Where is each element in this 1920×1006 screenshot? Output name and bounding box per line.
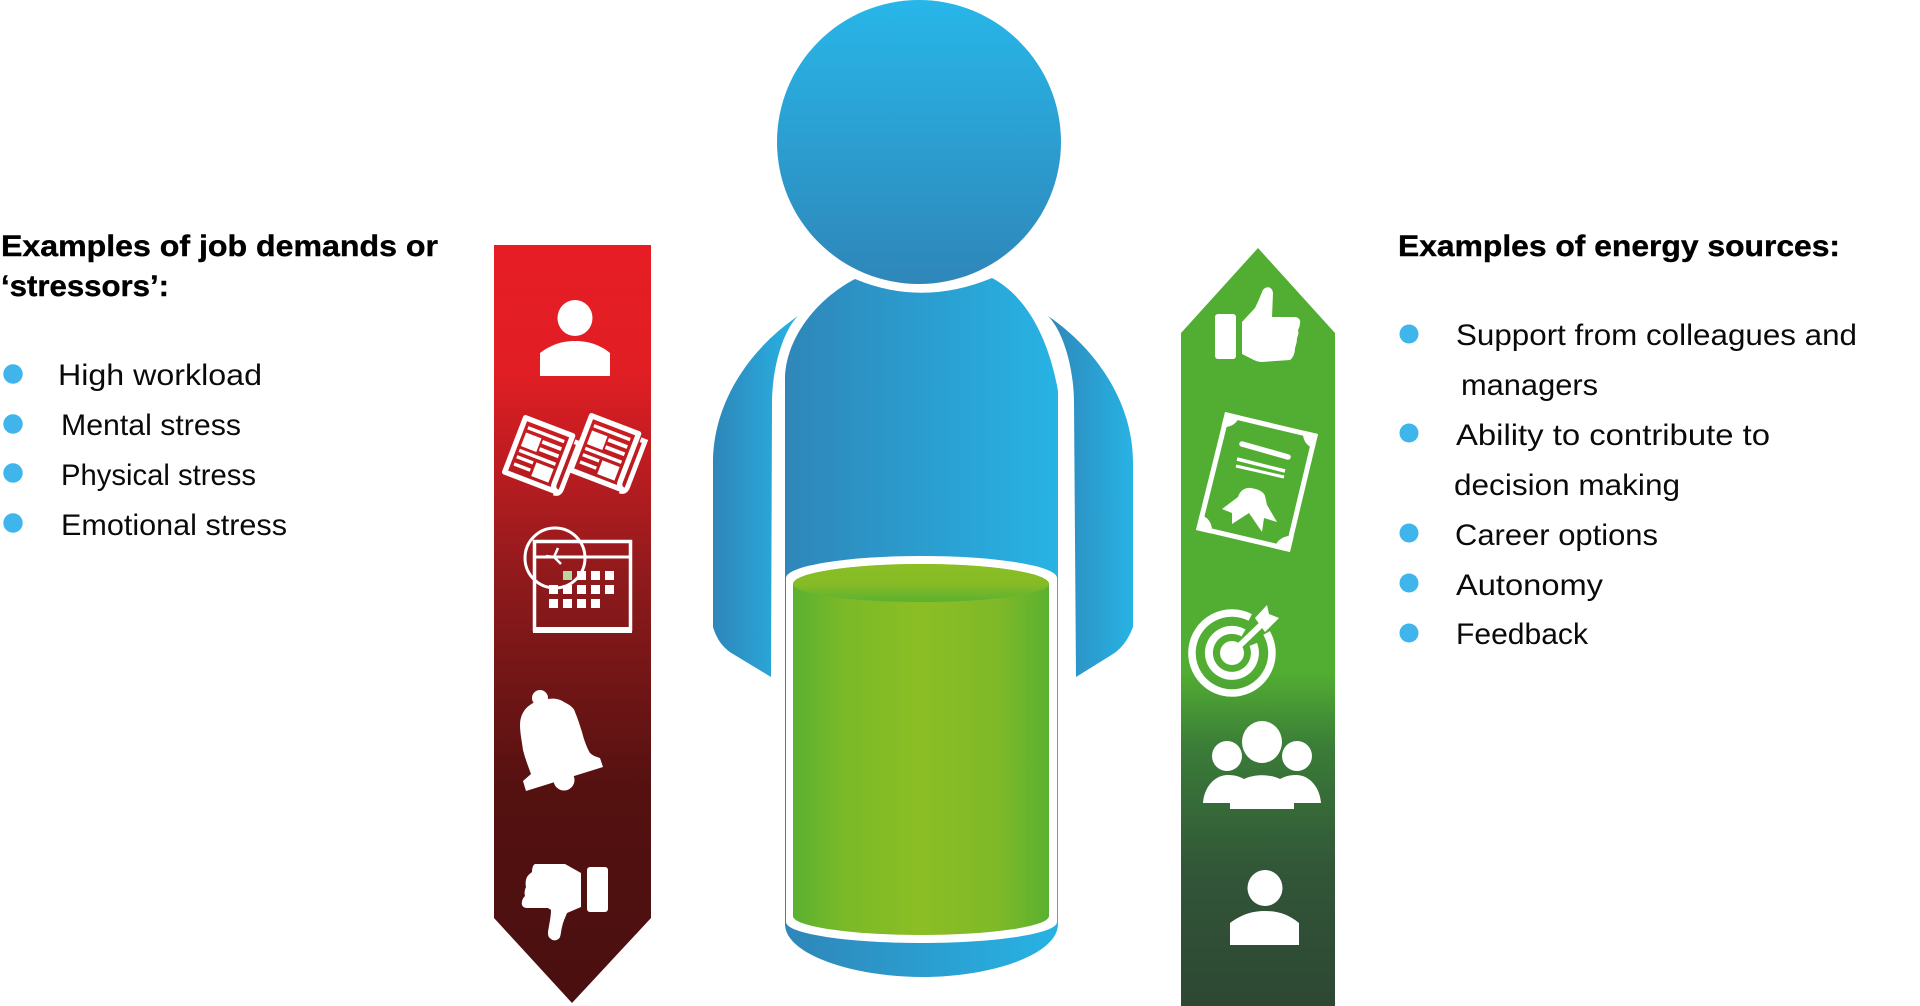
- icon: person: [1230, 870, 1299, 945]
- left arm: [713, 316, 798, 677]
- heading: job demands: ‘stressors’:: [1, 270, 169, 303]
- list: energy sources: Career options: [1455, 519, 1658, 552]
- torso: [785, 278, 1058, 977]
- list: job demands: Mental stress: [61, 409, 241, 442]
- list: energy sources: Ability to contribute to: [1456, 419, 1770, 452]
- icon: group of people: [1203, 721, 1321, 809]
- icon: target: [1192, 605, 1279, 693]
- icon: thumbs up: [1215, 287, 1300, 362]
- list: energy sources: [1400, 319, 1857, 651]
- icon: person: [540, 300, 610, 376]
- list: job demands: Emotional stress: [61, 509, 287, 542]
- list: energy sources: Feedback: [1456, 618, 1588, 651]
- list: job demands: High workload: [58, 359, 262, 392]
- icon: calendar with clock: [525, 528, 632, 633]
- icon: certificate: [1196, 412, 1318, 552]
- right arm: [1048, 316, 1133, 677]
- heading: job demands: Examples of job demands or: [1, 230, 438, 263]
- list: energy sources: decision making: [1454, 469, 1680, 502]
- icon: newspapers: [504, 416, 647, 495]
- icon: thumbs down: [522, 864, 608, 940]
- list: job demands: Physical stress: [61, 459, 256, 492]
- heading: energy sources: Examples of energy sources:: [1398, 230, 1840, 263]
- heading: job demands: [1, 230, 438, 303]
- red downward arrow with stressor icons: [494, 245, 651, 1003]
- list: energy sources: managers: [1461, 369, 1598, 402]
- icon: bell: [520, 690, 603, 791]
- energy cylinder: [786, 556, 1057, 943]
- green upward arrow with energy icons: [1180, 248, 1335, 1006]
- list: job demands: [3, 359, 287, 542]
- head: [777, 0, 1061, 284]
- list: energy sources: Support from colleagues and: [1456, 319, 1857, 352]
- list: energy sources: Autonomy: [1456, 569, 1603, 602]
- person figure: [713, 0, 1133, 977]
